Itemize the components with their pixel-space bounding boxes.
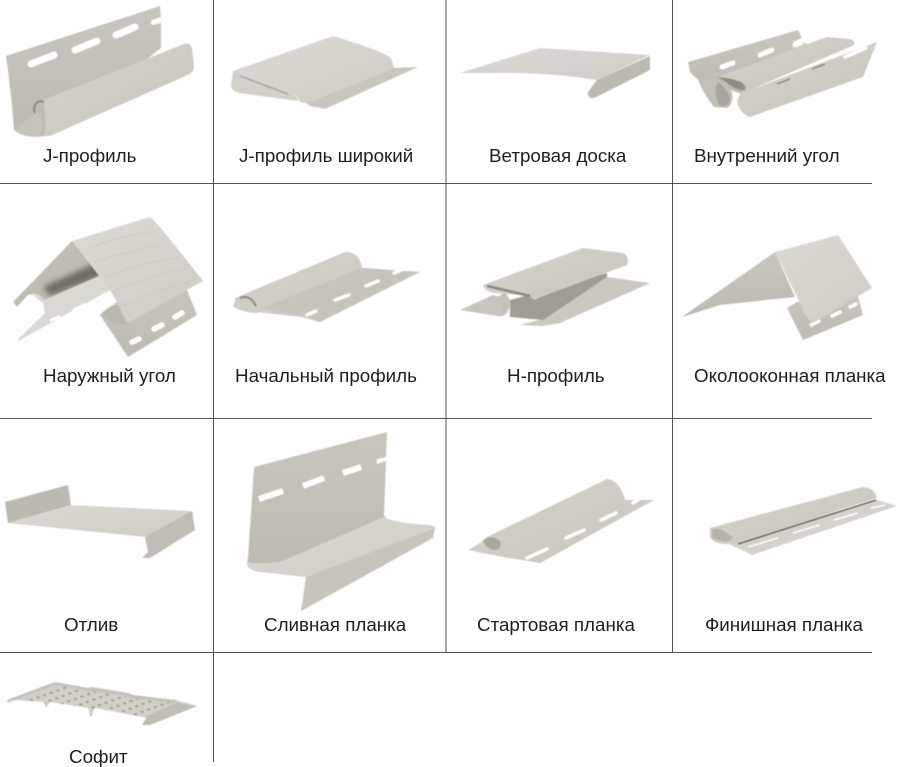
icon: drain plank — [247, 432, 435, 611]
cell: Начальный профиль — [233, 252, 420, 386]
cell: Н-профиль — [460, 248, 650, 386]
cell: Софит — [7, 682, 197, 767]
label: J-профиль широкий — [239, 145, 413, 166]
icon: wind board — [460, 48, 650, 98]
icon: H-profile — [460, 248, 650, 326]
cell: Стартовая планка — [468, 479, 654, 635]
cell: Внутренний угол — [688, 30, 877, 166]
label: Наружный угол — [43, 365, 176, 386]
label: Сливная планка — [264, 614, 407, 635]
cell: Финишная планка — [705, 487, 897, 635]
icon: starting profile — [233, 252, 420, 322]
cell: Околооконная планка — [682, 235, 886, 386]
icon: inner corner — [688, 30, 877, 117]
label: Околооконная планка — [694, 365, 886, 386]
cell: Отлив — [5, 485, 195, 635]
cell: J-профиль — [6, 6, 194, 166]
icon: J-profile — [6, 6, 194, 137]
icon: outer corner — [13, 217, 203, 357]
icon: soffit panel — [7, 682, 197, 725]
label: Н-профиль — [507, 365, 605, 386]
cell: J-профиль широкий — [231, 36, 418, 166]
label: Начальный профиль — [235, 365, 417, 386]
label: Внутренний угол — [694, 145, 840, 166]
label: J-профиль — [43, 145, 137, 166]
icon: starter plank — [468, 479, 654, 563]
cell: Сливная планка — [247, 432, 435, 635]
icon: wide J-profile — [231, 36, 418, 109]
label: Софит — [69, 746, 128, 767]
label: Ветровая доска — [489, 145, 627, 166]
icon: window trim — [682, 235, 872, 340]
label: Стартовая планка — [477, 614, 635, 635]
label: Отлив — [64, 614, 118, 635]
icon: finish plank — [710, 487, 897, 555]
icon: drip sill — [5, 485, 195, 558]
cell: Наружный угол — [13, 217, 203, 386]
label: Финишная планка — [705, 614, 863, 635]
cell: Ветровая доска — [460, 48, 650, 166]
